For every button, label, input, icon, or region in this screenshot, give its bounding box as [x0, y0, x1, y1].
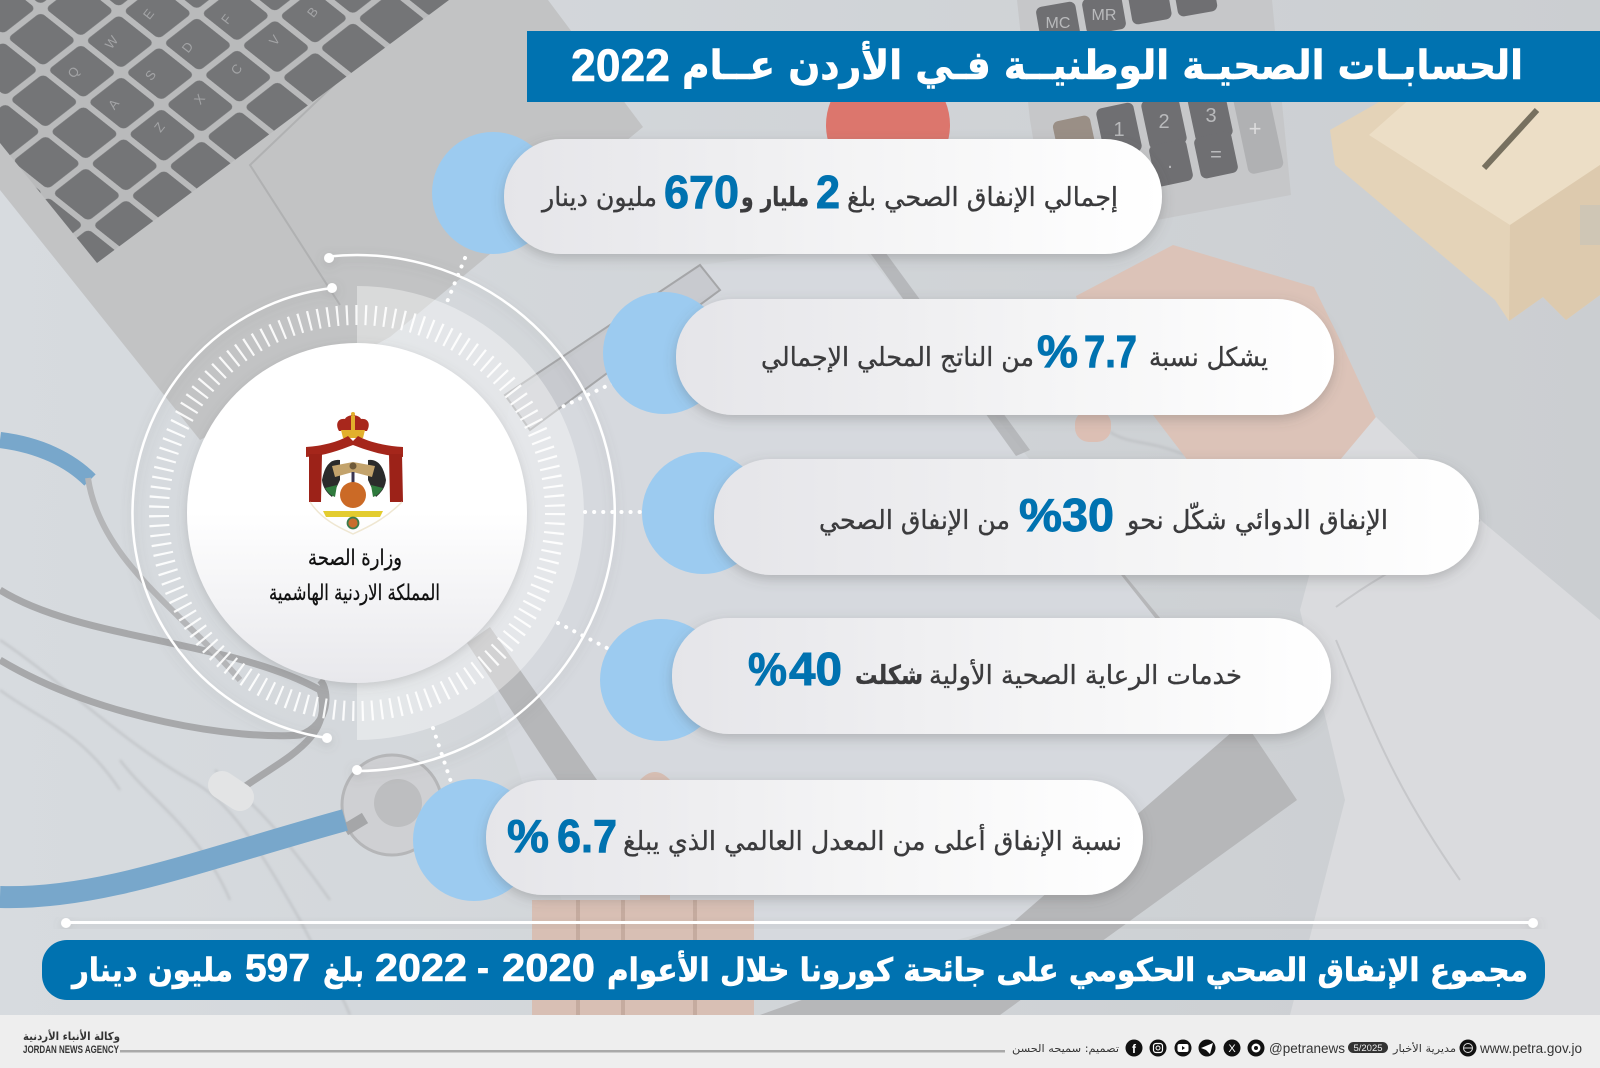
text 1	[540, 166, 1118, 218]
text 3: %	[1019, 489, 1062, 541]
calculator: 1	[1113, 119, 1125, 141]
calculator: 2	[1158, 111, 1170, 133]
tablet edge, top sliver	[868, 245, 1030, 456]
bottom banner: covid spending: مليون دينار	[70, 951, 233, 989]
pill 1	[504, 139, 1162, 254]
text 2: من الناتج المحلي الإجمالي	[761, 343, 1034, 373]
laptop trackpad outline	[250, 0, 423, 305]
pill 2	[676, 299, 1334, 415]
bottom banner: covid spending: 2020	[502, 947, 595, 990]
panel: stat 1 total spending	[432, 132, 1162, 254]
footer rule	[120, 1050, 1005, 1052]
calculator: =	[1210, 144, 1222, 166]
pill 4	[672, 618, 1331, 734]
laptop keyboard: C	[228, 61, 245, 78]
panel: stat 5 world average	[413, 779, 1143, 901]
title banner	[527, 31, 1600, 102]
red heart	[826, 63, 950, 187]
text 2: %	[1037, 326, 1078, 377]
bottom banner: covid spending: مجموع الإنفاق الصحي الحكومي على جائحة كورونا خلال الأعوام	[607, 950, 1528, 989]
text 3: 30	[1062, 489, 1114, 541]
small finger	[1075, 410, 1111, 442]
text 4: %	[748, 643, 787, 695]
agency logo text: JORDAN NEWS AGENCY	[23, 1044, 119, 1056]
website: www.petra.gov.jo	[1479, 1041, 1582, 1056]
social icons	[1126, 1040, 1264, 1056]
wooden house box	[1330, 90, 1600, 321]
icon: Jordan coat of arms	[306, 412, 403, 534]
connector dots	[433, 258, 642, 782]
ministry white disc	[187, 343, 527, 683]
text 3: الإنفاق الدوائي شكّل نحو	[1125, 502, 1388, 536]
tablet edge, left band	[467, 627, 660, 890]
hand	[1076, 245, 1377, 470]
gauge: central ministry dial	[132, 253, 615, 775]
text 1: 2	[816, 166, 840, 218]
calculator: MC	[1046, 15, 1070, 32]
bottom banner: covid spending: 2022	[375, 947, 467, 990]
glass pen	[505, 265, 720, 430]
panel: stat 4 primary care	[600, 618, 1331, 741]
text 1: 670	[664, 166, 739, 218]
bottom banner: covid spending: -	[477, 947, 489, 990]
laptop keyboard: E	[140, 6, 157, 22]
calculator: MR	[1092, 7, 1116, 24]
text 3: من الإنفاق الصحي	[819, 506, 1010, 536]
marble veins	[0, 432, 1185, 1015]
gauge light half disc	[357, 286, 584, 740]
laptop body	[0, 0, 643, 440]
laptop keyboard: A	[105, 96, 122, 112]
text 4: شكلت	[855, 661, 923, 691]
laptop keyboard: V	[266, 32, 283, 48]
panel: stat 2 GDP share	[603, 292, 1334, 415]
accent circle 2	[603, 292, 725, 414]
designer credit: تصميم: سميحه الحسن	[1012, 1043, 1119, 1055]
tablet edge, lower right	[760, 460, 1297, 1015]
text 3	[819, 489, 1388, 541]
calculator: +	[1249, 116, 1261, 141]
text 4	[748, 643, 1242, 695]
text 5: %	[507, 810, 549, 862]
social icons: X	[1228, 1043, 1236, 1055]
laptop keyboard	[0, 0, 460, 270]
shirt sleeve	[1290, 417, 1600, 1015]
text 2	[761, 326, 1268, 377]
laptop keyboard: Z	[151, 119, 168, 135]
laptop keyboard: D	[179, 39, 196, 56]
date badge	[1348, 1042, 1388, 1054]
laptop keyboard: S	[142, 67, 159, 83]
clipboard paper	[475, 245, 1240, 1015]
icon: globe	[1460, 1040, 1476, 1056]
laptop keyboard: F	[218, 11, 235, 27]
text 5: نسبة الإنفاق أعلى من المعدل العالمي الذي يبلغ	[623, 823, 1122, 857]
panel: stat 3 pharma share	[642, 452, 1479, 575]
ministry name	[269, 546, 440, 606]
text 4: 40	[789, 643, 842, 695]
title banner: 2022	[571, 40, 670, 91]
text 1: إجمالي الإنفاق الصحي بلغ	[847, 183, 1118, 213]
text 5: 6.7	[557, 810, 617, 862]
laptop keyboard: Q	[64, 64, 82, 81]
laptop keyboard: W	[102, 32, 122, 52]
pill 5	[486, 780, 1143, 895]
ministry name: وزارة الصحة	[308, 546, 402, 571]
stethoscope	[0, 440, 442, 897]
calculator: .	[1167, 151, 1173, 173]
text 5	[507, 810, 1122, 862]
text 4: خدمات الرعاية الصحية الأولية	[929, 658, 1242, 691]
pill 3	[714, 459, 1479, 575]
social icons: f	[1132, 1042, 1137, 1056]
accent circle 3	[642, 452, 764, 574]
ministry name: المملكة الاردنية الهاشمية	[269, 581, 440, 606]
text 1: مليون دينار	[540, 183, 657, 213]
accent circle 1	[432, 132, 554, 254]
news directorate: مديرية الأخبار	[1392, 1042, 1456, 1055]
text 1: مليار و	[739, 183, 809, 213]
gauge inner arc with dots	[132, 283, 337, 743]
accent circle 4	[600, 619, 722, 741]
text 2: 7.7	[1084, 326, 1137, 377]
laptop keyboard: B	[304, 4, 321, 20]
calculator	[1017, 0, 1291, 240]
fingers	[532, 772, 754, 1015]
gauge outer arc with dots	[324, 253, 615, 775]
text 2: يشكل نسبة	[1149, 343, 1268, 373]
calculator: 3	[1205, 105, 1217, 127]
bottom banner: covid spending	[42, 940, 1545, 1000]
agency logo text: وكالة الأنباء الأردنية	[23, 1029, 120, 1043]
bottom banner: covid spending: 597	[245, 947, 310, 990]
accent circle 5	[413, 779, 535, 901]
petranews handle: @petranews	[1269, 1041, 1345, 1056]
divider line with end dots	[61, 918, 1538, 928]
date badge: 5/2025	[1353, 1043, 1383, 1054]
laptop keyboard: X	[191, 91, 208, 107]
footer	[0, 1015, 1600, 1068]
gauge tick ring	[159, 315, 555, 711]
title banner: الحسابـات الصحيـة الوطنيــة فـي الأردن عــام	[682, 40, 1523, 89]
agency logo text	[23, 1029, 120, 1056]
bottom banner: covid spending: بلغ	[323, 951, 364, 989]
